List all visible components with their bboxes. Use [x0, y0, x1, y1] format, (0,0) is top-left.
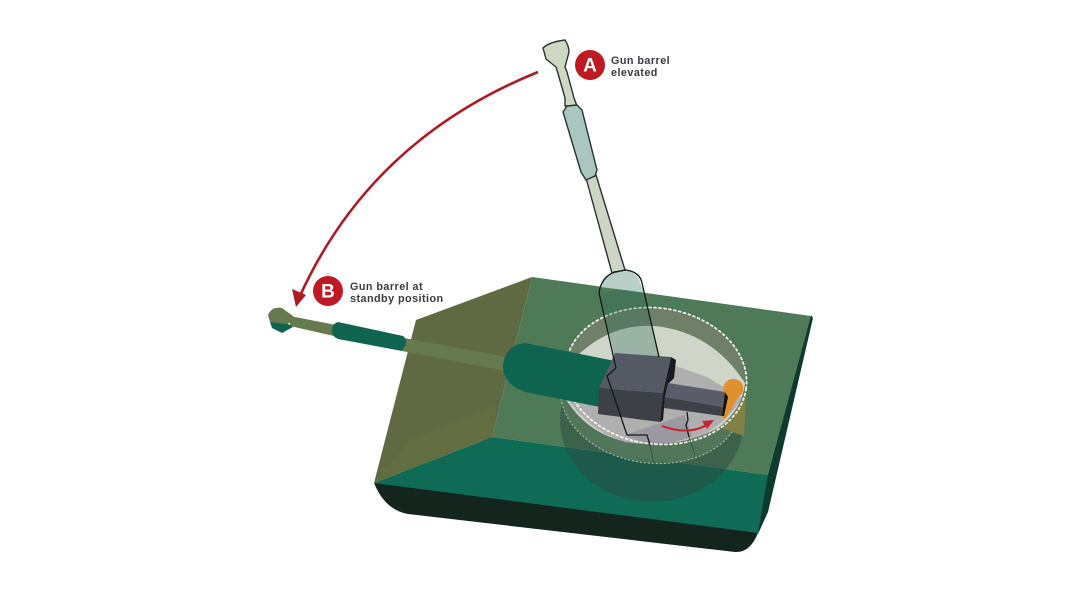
barrel B at standby [268, 308, 620, 408]
barrel outline over turret [599, 270, 695, 465]
hull olive left face [374, 277, 532, 483]
dark sphere under the ring [560, 338, 744, 502]
label B: B [321, 282, 335, 302]
block top [599, 353, 671, 393]
turret breech block [598, 353, 743, 422]
label B: Gun barrel at [350, 281, 423, 293]
muzzle and upper barrel [543, 40, 577, 106]
hull right side [758, 315, 813, 534]
block shadow [660, 357, 676, 422]
label B [313, 276, 444, 306]
rotation arrow [662, 420, 714, 431]
barrel thin front [290, 316, 336, 336]
muzzle underside [270, 322, 293, 333]
grey floor wedge [566, 365, 742, 444]
barrel base left edge [599, 270, 642, 368]
block front [598, 388, 663, 422]
olive recess [722, 396, 746, 436]
hidden lines [650, 437, 695, 465]
barrel rear [402, 338, 508, 371]
barrel sleeve [332, 322, 406, 351]
label A: A [583, 56, 597, 76]
upper ring band [556, 296, 756, 456]
tank hull [374, 277, 813, 552]
label A: elevated [611, 67, 658, 79]
breech shaft front [664, 397, 723, 416]
label A [575, 50, 670, 80]
pale inner floor [565, 326, 745, 444]
right outline [642, 283, 689, 437]
dotted ring edge [556, 296, 756, 456]
barrel base top [600, 270, 642, 292]
mantlet [503, 343, 620, 408]
shaft end [722, 392, 728, 416]
label A: Gun barrel [611, 55, 670, 67]
lower dotted ring [552, 319, 750, 475]
barrel sleeve [563, 105, 597, 180]
muzzle [268, 308, 294, 324]
barrel base tint [600, 287, 660, 367]
barrel A elevated [543, 40, 660, 367]
elevation arc arrow [292, 72, 538, 307]
lower thin barrel [586, 175, 625, 273]
hull front slope [374, 437, 768, 533]
left outline [607, 368, 650, 445]
breech shaft top [665, 383, 725, 407]
orange rammer [722, 379, 743, 419]
label B: standby position [350, 293, 444, 305]
hull top deck [492, 277, 811, 475]
hull bottom shadow [374, 483, 766, 552]
turret ring [552, 296, 756, 502]
